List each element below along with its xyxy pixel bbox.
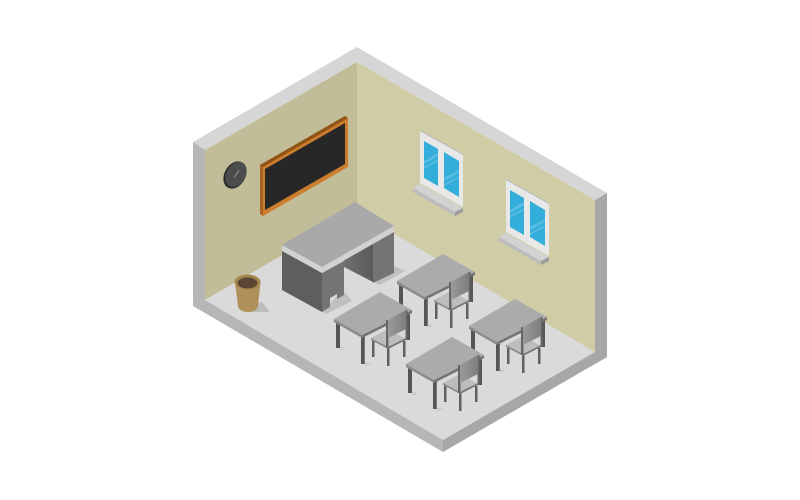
left outer wall edge <box>193 142 205 306</box>
left pedestal front <box>282 250 322 312</box>
window 2 <box>499 179 549 265</box>
student desk and chair, left <box>334 292 412 366</box>
floor <box>205 212 595 440</box>
floor base left side <box>193 300 443 452</box>
chalkboard <box>260 116 348 216</box>
left interior wall <box>205 62 357 300</box>
right pedestal <box>373 228 394 283</box>
wall top rim <box>193 47 607 200</box>
desk back panel <box>344 242 373 282</box>
window 1 <box>413 130 463 216</box>
wall clock <box>219 157 251 193</box>
student desk and chair, right <box>469 299 547 373</box>
right interior wall <box>357 62 595 354</box>
left pedestal side <box>322 261 344 312</box>
desk top <box>282 202 394 267</box>
desk shadows <box>373 266 405 285</box>
desk top edge <box>282 226 394 273</box>
right outer wall edge <box>595 193 607 364</box>
student desk and chair, front <box>406 337 484 411</box>
waste basket <box>234 274 270 312</box>
teacher desk <box>282 202 405 314</box>
room shell <box>193 47 607 452</box>
floor base right side <box>443 345 607 452</box>
student desk and chair, back <box>397 254 475 328</box>
